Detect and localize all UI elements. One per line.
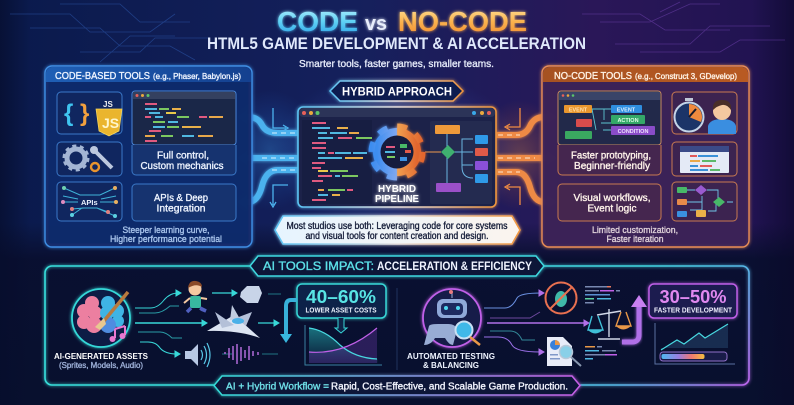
neon frame xyxy=(45,266,749,385)
event sheet window: ACTION xyxy=(617,118,639,124)
icon: speaker xyxy=(185,343,210,367)
icon: hybrid gear xyxy=(372,126,422,178)
stat box: 30-50%: 30–50% xyxy=(660,286,726,307)
text box: APIs and integration: APIs & Deep xyxy=(154,192,208,204)
note: code tradeoffs: Steeper learning curve, xyxy=(122,225,210,235)
flow arrows: asset generation xyxy=(135,290,281,357)
code editor window xyxy=(132,91,236,145)
icon box: stopwatch and user xyxy=(672,92,737,134)
text box: full control: Custom mechanics xyxy=(140,160,224,172)
icon: no bugs xyxy=(546,282,576,314)
stat box: 30-50% xyxy=(649,284,737,318)
title: CODE vs NO-CODE xyxy=(277,6,527,37)
arrow: savings into chart xyxy=(280,300,347,343)
tagline: Smarter tools, faster games, smaller teams. xyxy=(299,58,494,70)
label: automated testing: & BALANCING xyxy=(423,361,479,370)
icon box: flow diagram xyxy=(672,182,737,221)
callout: most studios use both: and visual tools for content creation and design. xyxy=(306,231,488,242)
bottom banner: AI + hybrid workflow xyxy=(214,376,580,395)
label: hybrid pipeline: PIPELINE xyxy=(375,194,419,205)
code log lines top xyxy=(585,286,620,304)
heading banner: AI tools impact: AI TOOLS IMPACT: xyxy=(263,261,374,273)
stat box: 40-60% xyxy=(297,284,386,318)
icon box: braces and JS badge: { xyxy=(64,100,73,127)
panel: hybrid pipeline window xyxy=(298,101,496,216)
icon box: braces and JS badge: JS xyxy=(103,100,113,109)
text box: visual workflows: Event logic xyxy=(588,202,636,214)
vertical light beam xyxy=(396,101,398,216)
text box: full control xyxy=(132,145,236,175)
callout: most studios use both xyxy=(275,216,520,244)
bottom banner: AI + hybrid workflow: AI + Hybrid Workflow = xyxy=(226,380,329,392)
icon box: braces and JS badge: } xyxy=(80,100,89,127)
arrows: center to code tools xyxy=(237,110,298,209)
arrows: thin orange returns xyxy=(505,108,520,205)
text box: faster prototyping: Beginner-friendly xyxy=(574,160,651,172)
stat box: 40-60%: LOWER ASSET COSTS xyxy=(306,306,376,314)
panel: code-based tools xyxy=(45,66,252,247)
heading banner: AI tools impact: ACCELERATION & EFFICIENCY xyxy=(377,261,532,273)
event sheet window xyxy=(558,91,661,145)
panel heading: no-code tools: NO-CODE TOOLS xyxy=(554,70,632,82)
stat box: 40-60%: 40–60% xyxy=(306,286,376,307)
icon box: braces and JS badge xyxy=(57,92,122,136)
label: AI-generated assets: AI-GENERATED ASSETS xyxy=(54,352,149,361)
text box: APIs and integration: Integration xyxy=(156,202,206,214)
event sheet window: EVENT xyxy=(569,108,588,114)
flowchart pane xyxy=(425,121,492,204)
panel: AI tools impact xyxy=(45,256,749,395)
label: AI-generated assets xyxy=(54,352,149,370)
label: automated testing xyxy=(407,352,495,370)
chart: faster development xyxy=(655,323,735,364)
icon box: app window xyxy=(672,142,737,176)
icon box: APIs network xyxy=(57,182,122,221)
text box: APIs and integration xyxy=(132,184,236,221)
icon: game character xyxy=(184,281,207,312)
title: CODE vs NO-CODE: NO-CODE xyxy=(398,6,527,37)
icon: balance scales xyxy=(588,309,631,339)
panel heading: code-based tools xyxy=(55,70,241,82)
title: CODE vs NO-CODE: vs xyxy=(365,13,387,35)
icon: AI brain and brush xyxy=(72,289,130,347)
note: code tradeoffs: Higher performance potential xyxy=(110,234,222,244)
center glow xyxy=(220,70,565,240)
note: no-code tradeoffs: Limited customization, xyxy=(592,225,678,235)
text box: faster prototyping: Faster prototyping, xyxy=(571,150,651,162)
event sheet window: CONDITION xyxy=(618,129,648,135)
icon box: gear and wrench xyxy=(57,142,122,176)
panel heading: no-code tools: (e.g., Construct 3, GDevelop) xyxy=(635,72,737,81)
label: AI-generated assets: (Sprites, Models, Audio) xyxy=(59,361,143,370)
panel: no-code tools xyxy=(542,66,749,247)
flow arrows: testing xyxy=(484,290,589,355)
label: automated testing: AUTOMATED TESTING xyxy=(407,352,495,361)
panel heading: code-based tools: CODE-BASED TOOLS xyxy=(55,70,150,82)
divider xyxy=(396,288,398,370)
icon box: APIs network: APIs xyxy=(81,198,98,207)
title: CODE vs NO-CODE: CODE xyxy=(277,6,358,37)
text box: faster prototyping xyxy=(558,145,661,175)
arrow: faster upward xyxy=(622,295,647,342)
progress bar xyxy=(660,352,727,361)
code log lines bottom xyxy=(585,346,617,360)
note: code tradeoffs xyxy=(110,225,222,244)
stat box: 30-50%: FASTER DEVELOPMENT xyxy=(654,306,732,314)
text box: visual workflows: Visual workflows, xyxy=(574,192,650,204)
text box: visual workflows xyxy=(558,184,661,221)
heading banner: AI tools impact xyxy=(250,256,544,276)
label: hybrid pipeline: HYBRID xyxy=(378,184,416,195)
hybrid approach banner xyxy=(285,81,510,101)
arrows: center to no-code tools xyxy=(496,110,557,209)
icon: jet xyxy=(207,305,260,338)
icon: robot, gamepad, magnifier xyxy=(423,289,481,347)
note: no-code tradeoffs xyxy=(592,225,678,244)
panel heading: code-based tools: (e.g., Phaser, Babylon.js) xyxy=(153,72,241,81)
callout: most studios use both: Most studios use both: Leveraging code for core systems xyxy=(286,221,508,232)
subtitle: HTML5 GAME DEVELOPMENT & AI ACCELERATION xyxy=(207,35,586,53)
icon: sound wave xyxy=(225,344,258,364)
icon: crystal rock xyxy=(240,286,262,303)
panel heading: no-code tools xyxy=(554,70,737,82)
hybrid approach banner: HYBRID APPROACH xyxy=(342,86,452,98)
event sheet window: EVENT xyxy=(617,108,636,114)
bottom banner: AI + hybrid workflow: Rapid, Cost-Effective, and Scalable Game Production. xyxy=(331,380,568,392)
icon: report magnifier xyxy=(547,337,581,366)
arrows: thin blue returns xyxy=(270,108,288,207)
code lines xyxy=(302,120,372,204)
icon box: braces and JS badge: JS xyxy=(102,115,119,131)
label: hybrid pipeline xyxy=(375,184,419,205)
chart: lower asset costs xyxy=(305,325,382,365)
note: no-code tradeoffs: Faster iteration xyxy=(606,234,664,244)
text box: full control: Full control, xyxy=(157,150,209,162)
